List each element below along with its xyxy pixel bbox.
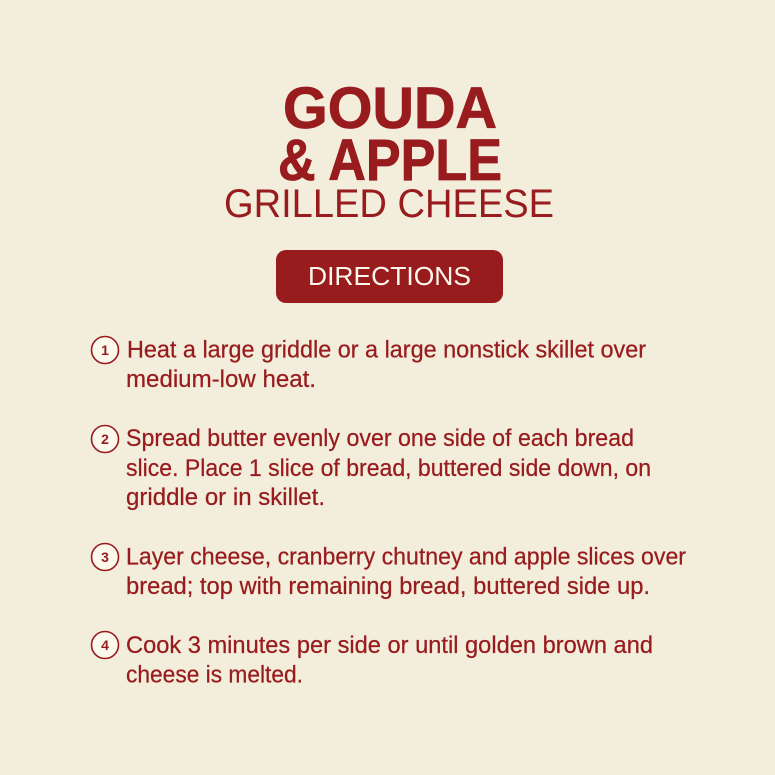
step 4 text: cheese is melted. (126, 662, 303, 688)
step 2 text: griddle or in skillet. (126, 484, 325, 511)
step 1 text: medium-low heat. (126, 366, 316, 393)
step 3 text (126, 544, 686, 600)
number badge 2 (92, 426, 118, 452)
number badge 4: 4 (101, 637, 109, 653)
title (224, 76, 554, 226)
step 2 text: Spread butter evenly over one side of each bread (126, 425, 634, 452)
step 1 (92, 336, 646, 393)
step 3 (92, 544, 686, 600)
step 4 text (126, 632, 653, 688)
number badge 4 (92, 632, 118, 658)
step 4 (92, 632, 653, 688)
step 2 (92, 425, 651, 511)
number badge 3 (92, 544, 118, 570)
title: GOUDA (283, 76, 497, 141)
number badge 1: 1 (101, 342, 109, 358)
title: GRILLED CHEESE (224, 182, 554, 226)
step 4 text: Cook 3 minutes per side or until golden brown and (126, 632, 653, 659)
step 3 text: Layer cheese, cranberry chutney and apple slices over (126, 544, 686, 570)
step 1 text: Heat a large griddle or a large nonstick skillet over (127, 336, 646, 364)
step 1 text (126, 336, 646, 393)
number badge 1 (92, 336, 118, 364)
step 2 text (126, 425, 651, 511)
directions badge: DIRECTIONS (308, 261, 471, 291)
title: & APPLE (278, 128, 502, 193)
step 3 text: bread; top with remaining bread, buttered side up. (126, 573, 650, 600)
number badge 2: 2 (101, 431, 109, 447)
number badge 3: 3 (101, 549, 109, 565)
step 2 text: slice. Place 1 slice of bread, buttered side down, on (126, 455, 651, 482)
directions badge (276, 250, 503, 303)
